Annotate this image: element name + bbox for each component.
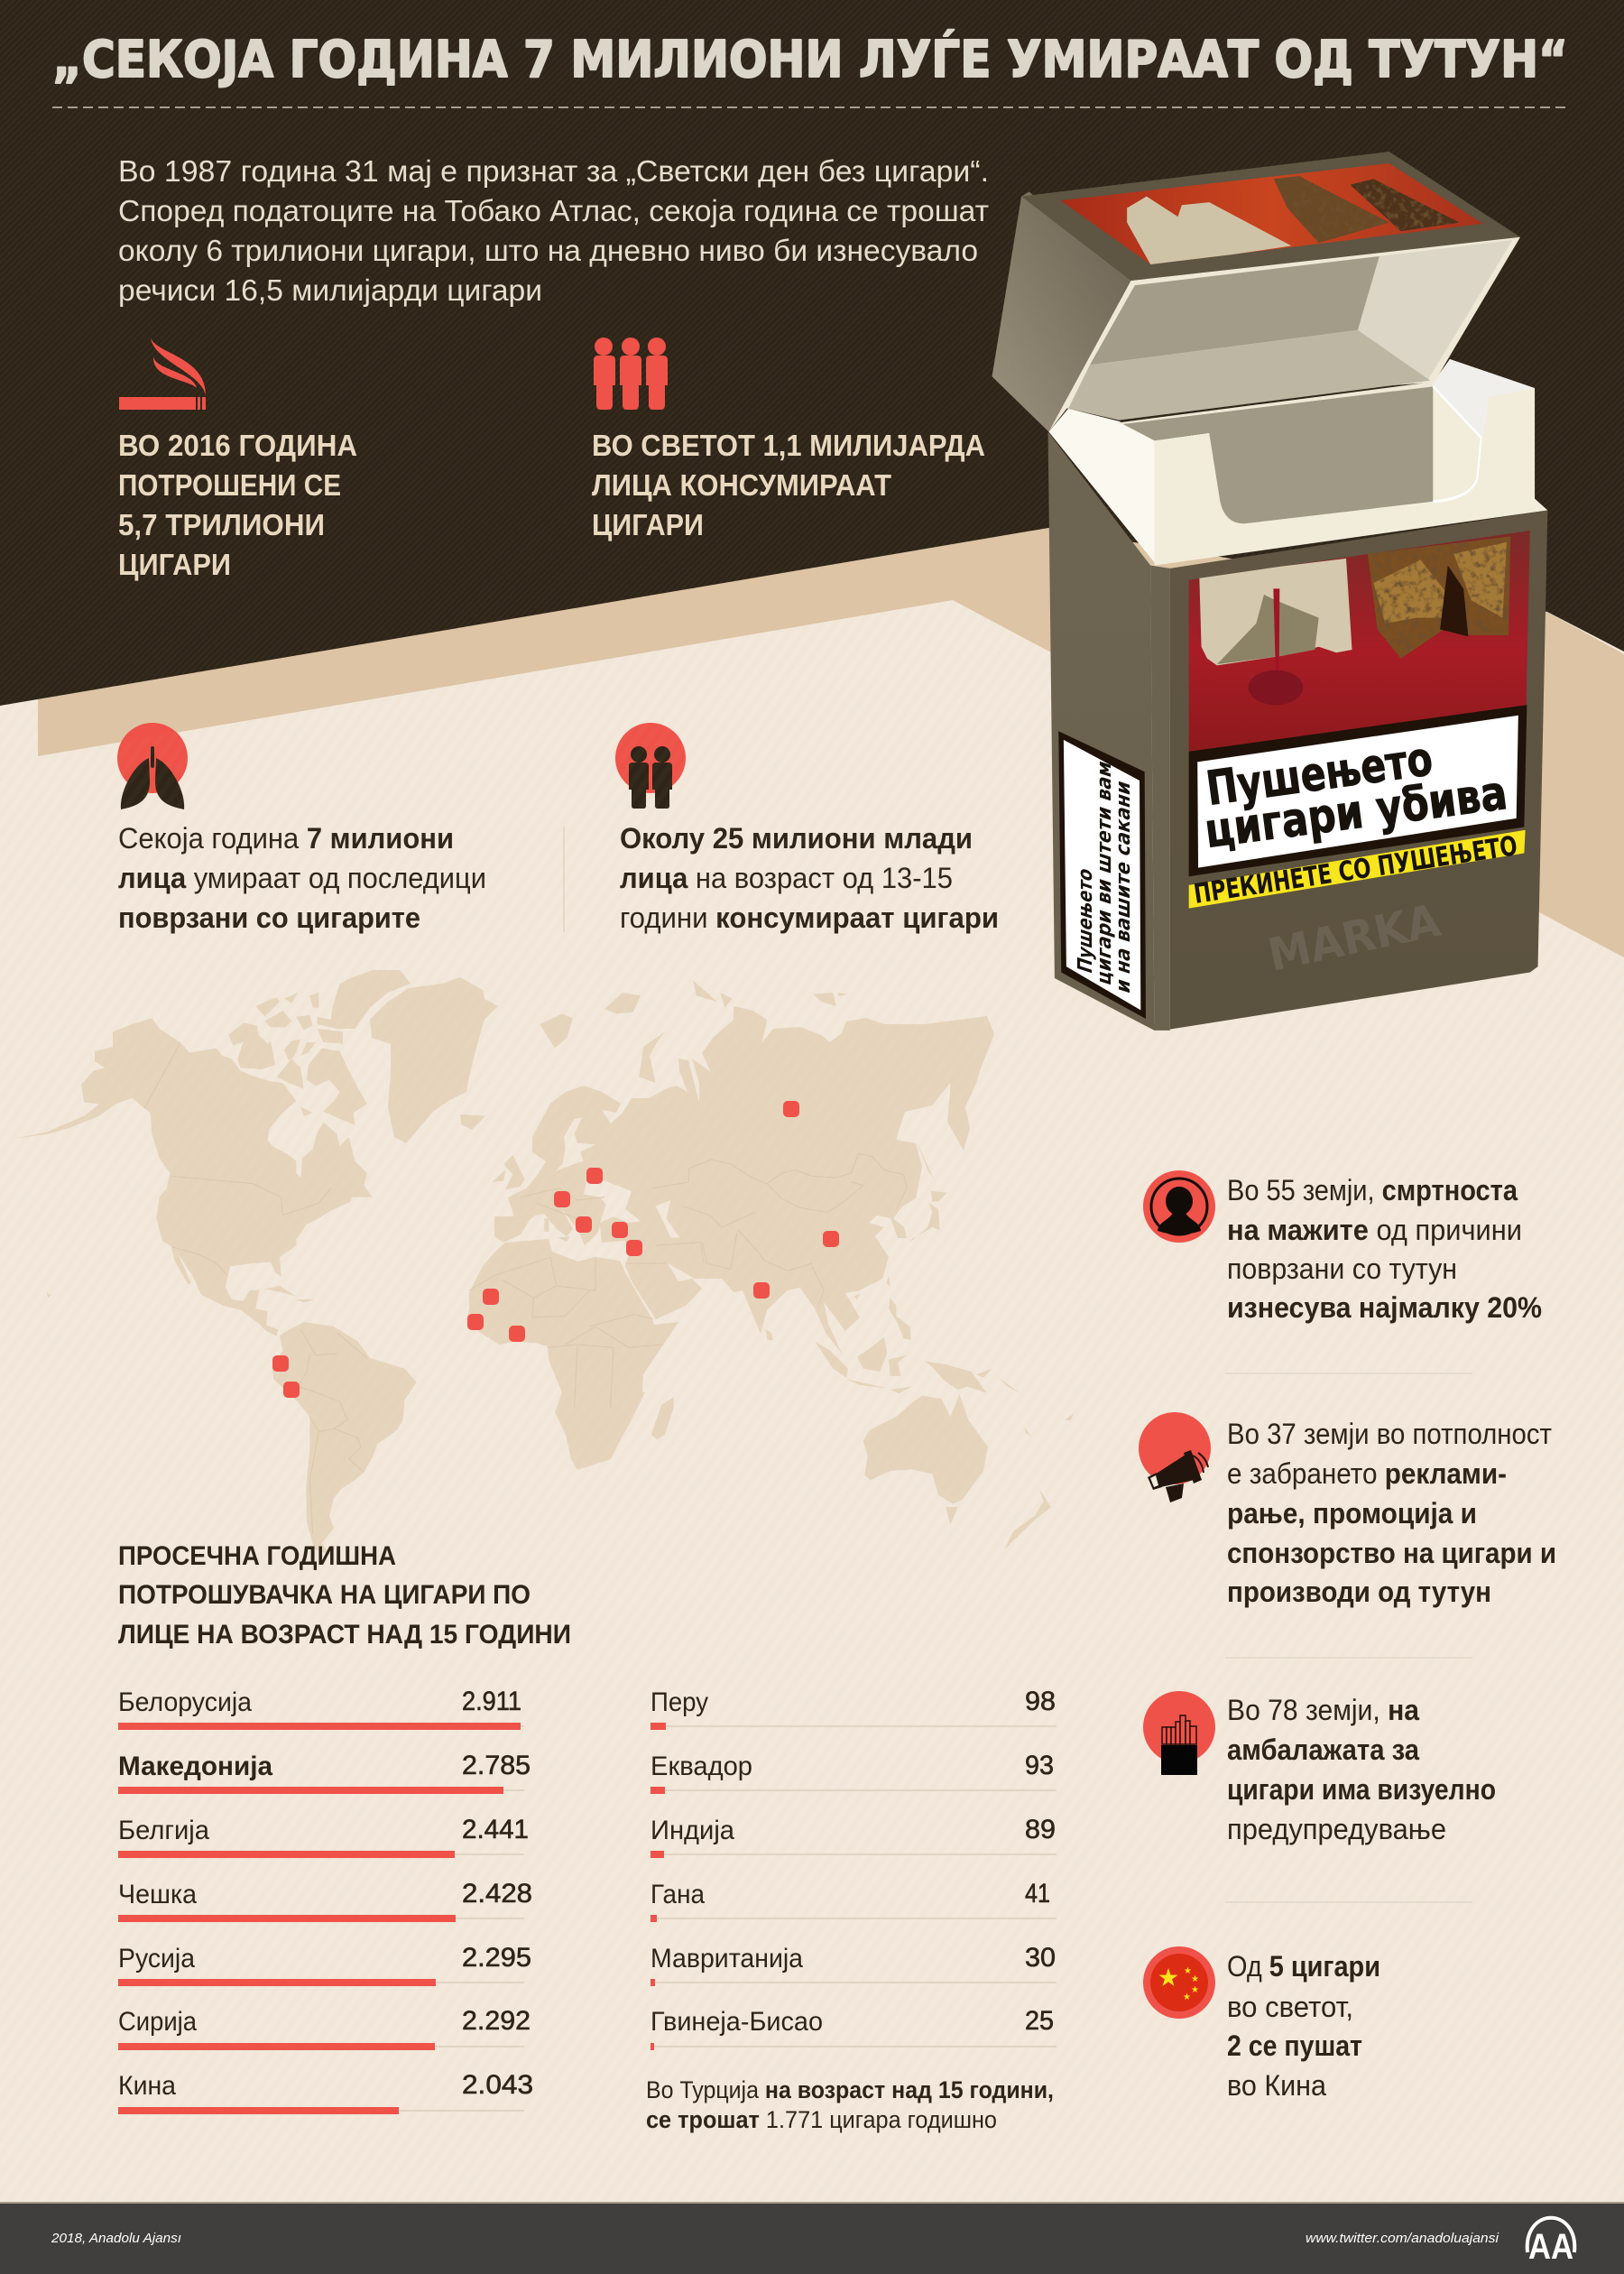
text: 7 million deaths: лица умираат од последици [118, 862, 486, 894]
row: Syria: Сирија [118, 2007, 197, 2037]
icon: lungs [117, 723, 188, 809]
row: India [651, 1815, 1057, 1858]
world map [15, 970, 1074, 1555]
text: 37 countries: Во 37 земји во потполност [1227, 1418, 1552, 1450]
text: 25 million youths: години консумираат цигари [620, 901, 999, 934]
Sulawesi [889, 1355, 907, 1376]
Axel Heiberg [309, 993, 318, 1008]
row: Ghana: Гана [651, 1880, 705, 1909]
row: Ecuador [651, 1751, 1057, 1794]
intro text: околу 6 трилиони цигари, што на дневно ниво би изнесувало [118, 234, 978, 267]
light diagonal stripes [0, 600, 1624, 2202]
diseased lung highlights [1373, 559, 1455, 624]
Novaya Zemlya [639, 1031, 665, 1083]
New Caledonia [1024, 1428, 1031, 1437]
row: China: 2.043 [462, 2070, 533, 2100]
lid inner right [1358, 240, 1512, 380]
Ellesmere Island [318, 970, 411, 1029]
text: China: Од 5 цигари [1227, 1950, 1380, 1983]
Caspian Sea [656, 1200, 679, 1238]
row: Peru: 98 [1025, 1687, 1056, 1716]
icon: three people [594, 337, 668, 410]
text: 25 million youths [620, 822, 999, 934]
lid inner lower [1068, 330, 1430, 421]
Hawaii [47, 1293, 51, 1298]
footer url: www.twitter.com/anadoluajansi [1306, 2231, 1499, 2246]
Sicily [558, 1236, 570, 1242]
row: Belgium: 2.441 [462, 1815, 529, 1844]
text: 78 countries: предупредување [1227, 1813, 1446, 1845]
North American borders [144, 1042, 331, 1275]
Hokkaido [931, 1191, 947, 1202]
Western islands and seas group [460, 981, 848, 1408]
table heading: ЛИЦЕ НА ВОЗРАСТ НАД 15 ГОДИНИ [118, 1620, 571, 1650]
inner liner right [1155, 359, 1547, 566]
icon: China flag [1143, 1946, 1215, 2019]
icon: cigarette with smoke [119, 337, 206, 410]
Euro-African borders [469, 1188, 704, 1408]
Victoria Island [237, 1035, 275, 1069]
row: Guinea-Bissau [651, 2006, 1057, 2050]
row: Belarus [118, 1687, 524, 1730]
Bismarck [976, 1369, 992, 1378]
lid pale lung [1127, 197, 1291, 264]
row: Ecuador: Еквадор [651, 1752, 752, 1781]
icon: male head [1143, 1170, 1215, 1243]
row: India: Индија [651, 1816, 734, 1845]
row: Ghana [651, 1879, 1057, 1922]
stat: 5.7 trillion: 5,7 ТРИЛИОНИ [118, 508, 325, 541]
lid dark lung 2 [1350, 179, 1460, 231]
Sakhalin [918, 1143, 934, 1179]
footer bar [0, 2202, 1624, 2274]
pack side [1048, 431, 1155, 1031]
Africa [467, 1239, 678, 1470]
Svalbard [540, 1013, 573, 1049]
Wrangel Island [837, 993, 848, 996]
Hainan [854, 1293, 860, 1300]
row: Guinea-Bissau: Гвинеја-Бисао [651, 2007, 823, 2037]
text: 55 countries: изнесува најмалку 20% [1227, 1291, 1542, 1324]
Honshu [909, 1203, 940, 1243]
icon: China flag: ★ [1191, 1974, 1199, 1984]
Sri Lanka [765, 1329, 773, 1340]
row: Syria [118, 2006, 531, 2050]
text: 78 countries: Во 78 земји, на [1227, 1694, 1419, 1726]
Madagascar [651, 1397, 674, 1439]
lung hollow [1440, 566, 1468, 636]
row: China: Кина [118, 2071, 176, 2101]
row: Ecuador: 93 [1025, 1751, 1054, 1780]
text: 37 countries: е забрането реклами- [1227, 1457, 1507, 1490]
warning white [1197, 716, 1518, 868]
pack interior [1123, 386, 1433, 523]
side warning line 2: цигари ви штети вам [1093, 758, 1116, 988]
lid inner back [1090, 256, 1379, 365]
table heading: ПРОСЕЧНА ГОДИШНА [118, 1541, 396, 1571]
row: Ghana: 41 [1025, 1879, 1050, 1909]
intro text: Во 1987 година 31 мај е признат за „Светски ден без цигари“. [118, 154, 989, 188]
stat: 1.1 billion: ЛИЦА КОНСУМИРААТ [592, 468, 891, 502]
stat: 5.7 trillion [118, 429, 357, 581]
row: Belarus: Белорусија [118, 1687, 252, 1717]
Taiwan [887, 1275, 890, 1288]
cigarette pack illustration [992, 152, 1547, 1031]
text: 25 million youths: лица на возраст од 13-15 [620, 862, 953, 894]
row: India: 89 [1025, 1815, 1056, 1844]
Sumatra [815, 1342, 848, 1378]
icon: China flag: ★ [1191, 1985, 1199, 1995]
Cuba [264, 1286, 296, 1297]
text: 25 million youths: Околу 25 милиони млади [620, 822, 973, 855]
warning line 2: цигари убива [1202, 766, 1510, 859]
table heading: ПОТРОШУВАЧКА НА ЦИГАРИ ПО [118, 1580, 531, 1610]
text: 55 countries: на мажите од причини [1227, 1214, 1522, 1246]
windpipe [1273, 588, 1279, 702]
Baja California [171, 1247, 191, 1284]
row: Mauritania: Мавританија [651, 1944, 803, 1974]
lid inner rim [1048, 237, 1520, 431]
texture [0, 0, 1624, 706]
stat: 1.1 billion: ВО СВЕТОТ 1,1 МИЛИЈАРДА [592, 429, 985, 462]
Lesser Sunda [890, 1387, 911, 1393]
bar chart: highest consumption [118, 1687, 533, 2114]
Melville Island [255, 997, 280, 1017]
brand: MARKA [1263, 894, 1445, 982]
Solomon [999, 1378, 1020, 1392]
lung centre [1217, 595, 1319, 664]
note: Turkey: Во Турција на возраст над 15 години, [646, 2076, 1054, 2103]
text: 55 countries: поврзани со тутун [1227, 1253, 1457, 1285]
text: 55 countries [1227, 1174, 1542, 1324]
row: Macedonia [118, 1751, 531, 1794]
lip line [1115, 382, 1433, 424]
Sardinia [544, 1218, 549, 1232]
footer credit: 2018, Anadolu Ajansı [51, 2231, 181, 2246]
diseased lung highlights 2 [1453, 542, 1507, 618]
tan diagonal band [38, 523, 1624, 957]
lid top face [1021, 152, 1520, 281]
yellow strip [1189, 830, 1526, 909]
side label black [1058, 731, 1146, 1019]
stat: 1.1 billion [592, 429, 985, 541]
Great Britain [503, 1155, 525, 1189]
text: 37 countries [1227, 1418, 1556, 1608]
Asian borders [652, 1153, 907, 1306]
Boothia [277, 1058, 304, 1089]
row: Mauritania [651, 1943, 1057, 1986]
title dashed rule [52, 106, 1568, 108]
Palawan [882, 1320, 889, 1336]
AA logo: AA [1528, 2227, 1573, 2267]
stat: 5.7 trillion: ПОТРОШЕНИ СЕ [118, 468, 341, 502]
Fiji [1065, 1414, 1074, 1420]
row: Peru: Перу [651, 1687, 708, 1717]
icon: megaphone [1139, 1412, 1211, 1502]
row: Czechia [118, 1879, 532, 1922]
lid dark lung [1274, 176, 1389, 243]
white left wing [1048, 409, 1155, 562]
Borneo [857, 1337, 887, 1372]
row: China [118, 2070, 533, 2114]
row: Macedonia: Македонија [118, 1752, 272, 1781]
note: Turkey: се трошат 1.771 цигара годишно [646, 2106, 997, 2133]
Baltic Sea [555, 1117, 595, 1171]
quit strip text: ПРЕКИНЕТЕ СО ПУШЕЊЕТО [1192, 830, 1519, 911]
intro text: речиси 16,5 милијарди цигари [118, 273, 542, 307]
New Zealand [1004, 1489, 1051, 1549]
stat: 1.1 billion: ЦИГАРИ [592, 508, 704, 541]
Eurasia [494, 1006, 994, 1354]
warning line 1: Пушењето [1204, 732, 1435, 817]
Somerset [300, 1042, 316, 1056]
Banks Island [228, 1022, 259, 1045]
lid side [992, 191, 1130, 431]
Asia-Pacific group [651, 1143, 1074, 1549]
divider [563, 827, 565, 932]
South America group [272, 1322, 417, 1555]
text: China [1227, 1950, 1380, 2102]
stat: 5.7 trillion: ВО 2016 ГОДИНА [118, 429, 357, 462]
row: Macedonia: 2.785 [462, 1751, 531, 1780]
Java [846, 1379, 887, 1388]
white right tab [1433, 359, 1535, 438]
row: Peru [651, 1687, 1057, 1730]
diseased lung [1368, 536, 1510, 659]
Severnaya Zemlya [693, 981, 717, 1002]
text: 78 countries: амбалажата за [1227, 1733, 1419, 1766]
Philippines [889, 1298, 911, 1340]
icon: two young people [615, 723, 686, 809]
Cornwallis [296, 1015, 313, 1031]
Black Sea [584, 1180, 641, 1223]
text: 37 countries: спонзорство на цигари и [1227, 1537, 1556, 1569]
pack bevel [1150, 566, 1170, 1031]
white lip [1433, 386, 1481, 502]
text: 7 million deaths: поврзани со цигарите [118, 901, 420, 934]
row: Guinea-Bissau: 25 [1025, 2006, 1054, 2036]
text: 37 countries: рање, промоција и [1227, 1497, 1477, 1530]
table heading [118, 1541, 571, 1650]
intro text [118, 154, 989, 307]
Hispaniola [296, 1299, 314, 1302]
Prince of Wales [284, 1040, 300, 1060]
note: Turkey [646, 2076, 1054, 2133]
icon: China flag: ★ [1184, 1966, 1192, 1976]
text: 55 countries: Во 55 земји, смртноста [1227, 1174, 1518, 1206]
dark blood [1249, 670, 1303, 705]
Mackenzie King [284, 993, 298, 1003]
Southampton Island [300, 1107, 313, 1116]
text: 78 countries [1227, 1694, 1496, 1845]
row: Czechia: 2.428 [462, 1879, 532, 1909]
pale lung [1199, 559, 1352, 665]
row: Russia: Русија [118, 1944, 195, 1974]
Devon Island [318, 1029, 343, 1044]
text: 7 million deaths: Секоја година 7 милиони [118, 822, 454, 855]
Iceland [460, 1114, 485, 1130]
icon: China flag: ★ [1183, 1992, 1191, 2002]
New Guinea [925, 1361, 986, 1392]
warning black [1189, 705, 1527, 876]
Franz Josef Land [604, 993, 641, 1013]
Bolshevik Island [720, 993, 733, 1008]
map markers [272, 1101, 839, 1398]
Greenland [370, 977, 498, 1143]
dark header panel [0, 0, 1624, 706]
Bathurst Island [264, 1011, 291, 1027]
lid image [1060, 163, 1483, 264]
side warning line 3: и на вашите сакани [1112, 778, 1135, 996]
text: China: 2 се пушат [1227, 2029, 1362, 2062]
row: Czechia: Чешка [118, 1880, 197, 1909]
text: China: во светот, [1227, 1991, 1353, 2023]
row: Belgium: Белгија [118, 1816, 209, 1845]
text: 7 million deaths [118, 822, 486, 934]
front image [1189, 531, 1530, 752]
bar chart: lowest consumption [651, 1687, 1057, 2050]
row: Russia [118, 1943, 531, 1986]
Tasmania [946, 1507, 958, 1525]
stat: 5.7 trillion: ЦИГАРИ [118, 548, 231, 581]
Ireland [492, 1170, 505, 1182]
row: Belgium [118, 1815, 529, 1858]
Australia [863, 1394, 988, 1504]
row: Syria: 2.292 [462, 2006, 531, 2036]
text: 78 countries: цигари има визуелно [1227, 1773, 1496, 1806]
side label white [1064, 740, 1140, 1010]
text: China: во Кина [1227, 2069, 1326, 2102]
side warning line 1: Пушењето [1075, 865, 1097, 976]
icon: cigarette pack [1143, 1691, 1215, 1775]
North America group [15, 970, 411, 1336]
row: Russia: 2.295 [462, 1943, 531, 1973]
New Siberian Islands [814, 993, 836, 1006]
South American borders [298, 1329, 367, 1534]
Baffin Island [307, 1049, 367, 1125]
text: 37 countries: производи од тутун [1227, 1576, 1491, 1608]
row: Belarus: 2.911 [462, 1687, 521, 1716]
pack front [1170, 510, 1547, 1030]
row: Mauritania: 30 [1025, 1943, 1056, 1973]
intro text: Според податоците на Тобако Атлас, секоја година се трошат [118, 194, 989, 227]
